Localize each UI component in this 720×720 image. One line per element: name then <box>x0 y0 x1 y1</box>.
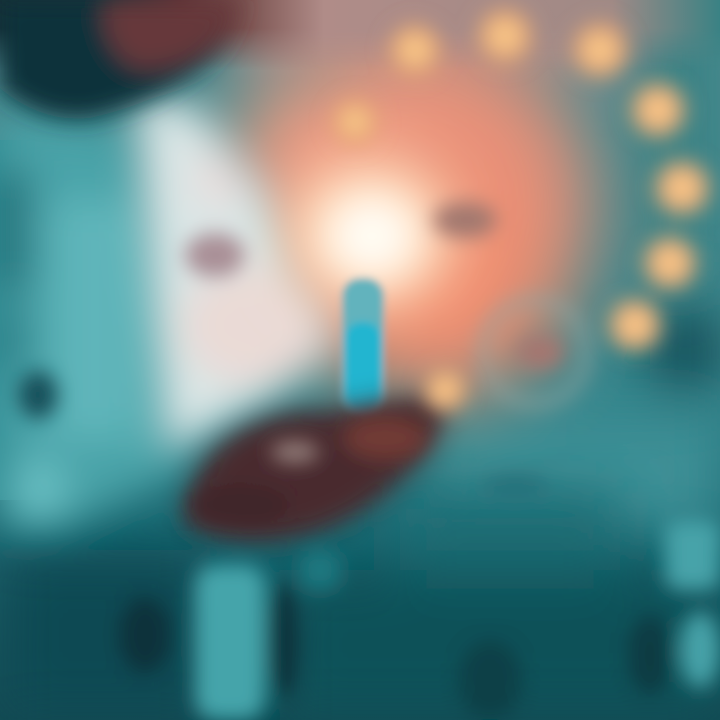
glowing orbs arc <box>325 0 718 418</box>
dark spot on sleeve <box>18 371 58 419</box>
top-left dark head <box>0 0 238 119</box>
bottom dark and light streaks <box>119 475 720 720</box>
left coat: teal sleeve <box>0 115 180 530</box>
central white glow <box>285 160 455 310</box>
faint ring near lower right <box>483 300 587 404</box>
coat mark <box>185 233 245 277</box>
faint face shadow at right of glow <box>433 202 497 238</box>
background: left edge teal fade <box>0 140 50 500</box>
peach glow behind the vial <box>230 35 595 400</box>
background: upper right teal haze <box>240 0 720 530</box>
hand: red-brown palm <box>184 397 444 541</box>
hand: palm highlights <box>190 416 427 525</box>
left coat: pale white panel <box>135 90 335 455</box>
vial: cyan tube <box>342 278 384 412</box>
background: bottom dark teal <box>0 490 720 720</box>
top edge colour band <box>0 0 720 70</box>
